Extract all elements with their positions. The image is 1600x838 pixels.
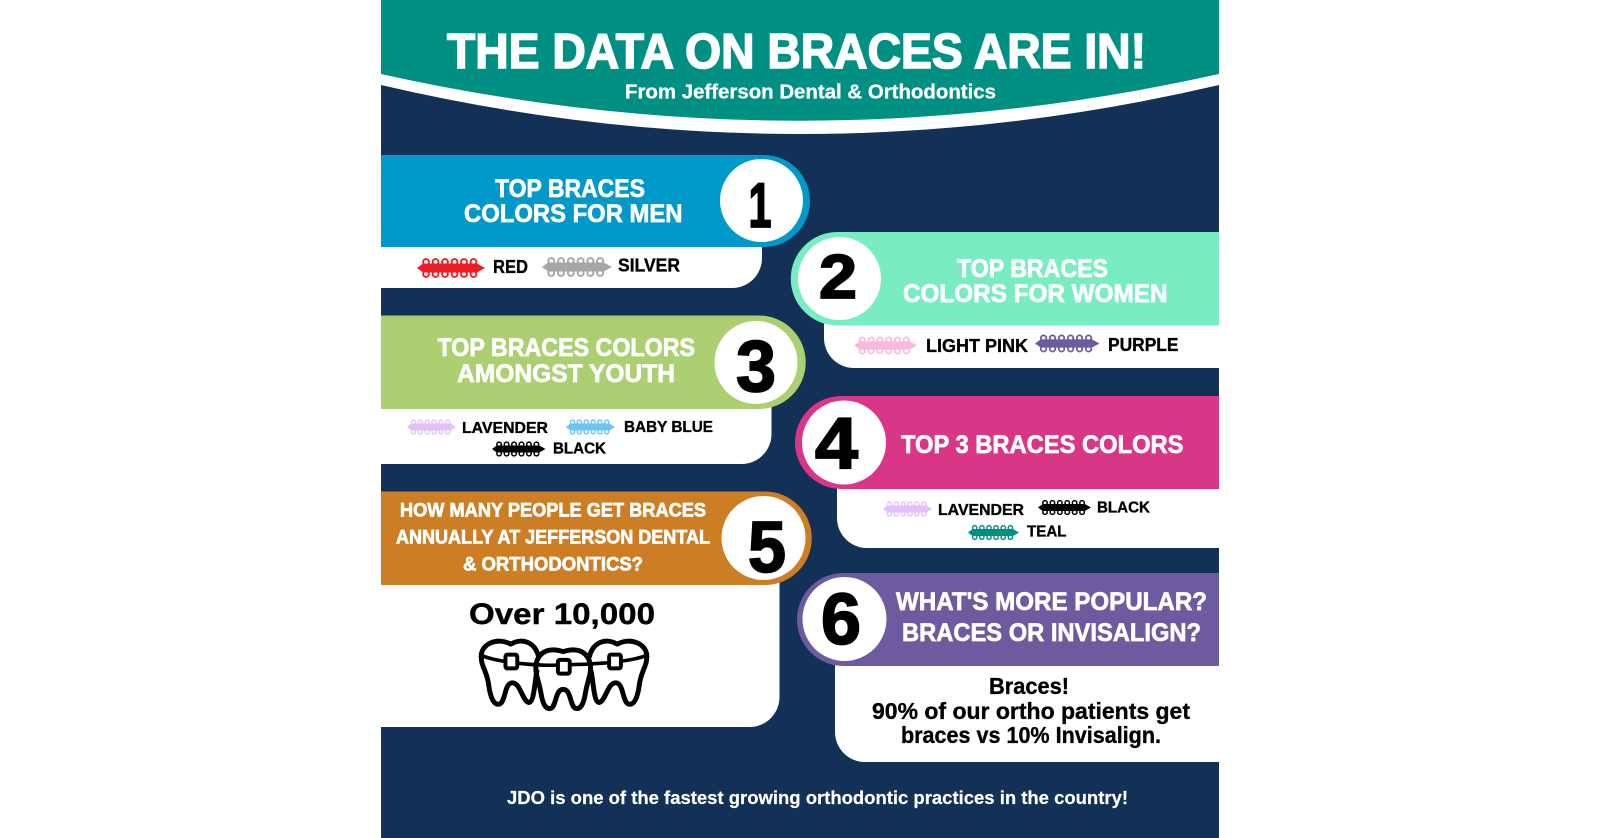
panel 6: braces or invisalign bbox=[797, 573, 1219, 762]
heading 5: & ORTHODONTICS? bbox=[463, 554, 643, 576]
icon: silver braces bbox=[542, 258, 612, 276]
label: black: BLACK bbox=[1097, 500, 1150, 516]
subtitle: From Jefferson Dental & Orthodontics bbox=[625, 82, 996, 104]
text: over 10,000: Over 10,000 bbox=[469, 598, 655, 631]
panel 4: top 3 braces colors bbox=[795, 396, 1219, 548]
number 5: 5 bbox=[748, 508, 786, 588]
panel 1: top braces colors for men bbox=[381, 155, 810, 288]
heading 2: COLORS FOR WOMEN bbox=[903, 280, 1168, 308]
heading 3: TOP BRACES COLORS bbox=[438, 334, 695, 362]
panel 5: how many people get braces bbox=[381, 492, 812, 727]
label: purple: PURPLE bbox=[1108, 335, 1178, 355]
label: teal: TEAL bbox=[1027, 524, 1067, 540]
icon: baby blue braces bbox=[566, 420, 615, 434]
heading 1: COLORS FOR MEN bbox=[464, 200, 682, 228]
heading 6 bbox=[896, 588, 1207, 647]
number 3: 3 bbox=[736, 327, 776, 407]
footer text: JDO is one of the fastest growing orthodontic practices in the country! bbox=[507, 787, 1128, 808]
heading 4: TOP 3 BRACES COLORS bbox=[901, 431, 1184, 459]
answer text: 90% of our ortho patients get bbox=[872, 698, 1190, 724]
icon: lavender braces bbox=[407, 420, 456, 434]
heading 1: TOP BRACES bbox=[495, 175, 645, 203]
header banner bbox=[381, 0, 1219, 134]
heading 3: AMONGST YOUTH bbox=[457, 360, 675, 388]
heading 2 bbox=[903, 255, 1168, 308]
answer text: Braces! bbox=[989, 673, 1069, 699]
icon: lavender braces bbox=[883, 502, 932, 516]
label: black: BLACK bbox=[553, 440, 606, 458]
panel 2: top braces colors for women bbox=[791, 232, 1219, 368]
icon: black braces bbox=[1038, 501, 1091, 514]
answer text: braces vs 10% Invisalign. bbox=[901, 722, 1161, 748]
poster background bbox=[381, 0, 1219, 838]
heading 5: HOW MANY PEOPLE GET BRACES bbox=[400, 500, 706, 522]
icon: teal braces bbox=[968, 526, 1019, 539]
label: lavender: LAVENDER bbox=[938, 502, 1024, 519]
number 1: 1 bbox=[748, 171, 772, 241]
answer text bbox=[872, 673, 1190, 748]
label: red: RED bbox=[493, 257, 528, 277]
number 6: 6 bbox=[821, 580, 861, 660]
icon: light pink braces bbox=[854, 337, 917, 354]
icon: black braces bbox=[492, 442, 546, 456]
heading 1 bbox=[464, 175, 682, 228]
heading 6: WHAT'S MORE POPULAR? bbox=[896, 588, 1207, 616]
heading 3 bbox=[438, 334, 695, 388]
panel 3: top braces colors amongst youth bbox=[381, 316, 806, 464]
label: baby blue: BABY BLUE bbox=[624, 419, 713, 436]
number 2: 2 bbox=[819, 243, 857, 312]
heading 6: BRACES OR INVISALIGN? bbox=[902, 619, 1201, 647]
number 4: 4 bbox=[815, 404, 858, 484]
icon: teeth with braces bbox=[481, 641, 647, 709]
label: lavender: LAVENDER bbox=[462, 420, 548, 437]
title: THE DATA ON BRACES ARE IN! bbox=[447, 25, 1146, 79]
label: silver: SILVER bbox=[618, 256, 680, 276]
icon: red braces bbox=[417, 259, 485, 277]
heading 5: ANNUALLY AT JEFFERSON DENTAL bbox=[396, 528, 710, 548]
heading 5 bbox=[396, 500, 710, 576]
heading 2: TOP BRACES bbox=[957, 255, 1108, 283]
label: light pink: LIGHT PINK bbox=[926, 336, 1028, 356]
icon: purple braces bbox=[1035, 335, 1100, 352]
